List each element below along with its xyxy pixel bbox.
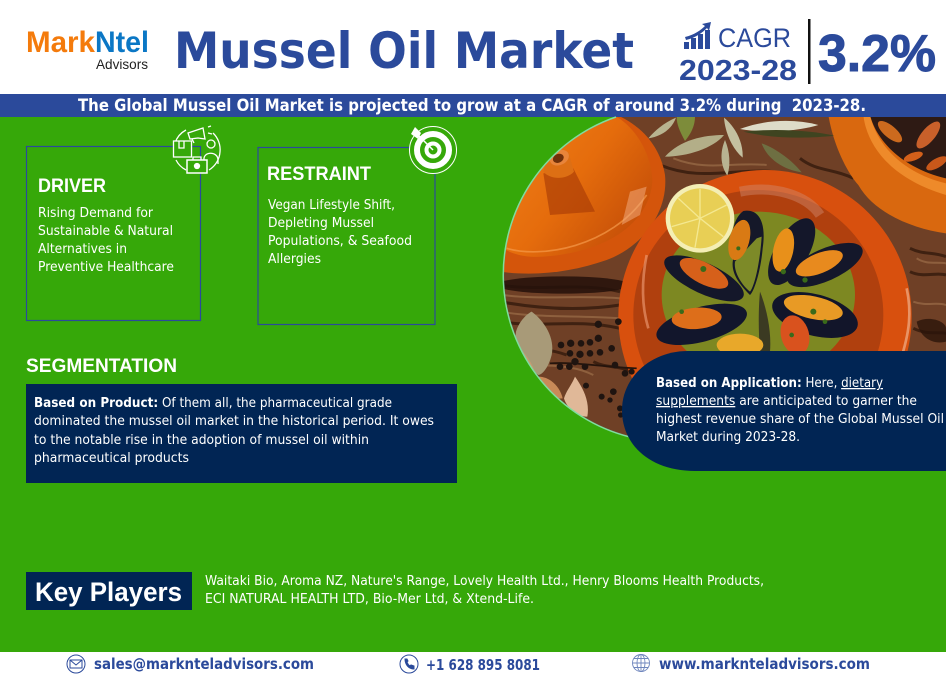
panel: based on product: to the notable rise in the adoption of mussel oil within [34, 433, 369, 448]
panel: restraint [258, 148, 435, 324]
logo: MarkNtel Advisors: Advisors [96, 56, 148, 72]
panel: based on product: dominated the mussel oil market in the historical period. It owes [34, 414, 434, 429]
panel: driver: DRIVER [38, 176, 106, 197]
header background [0, 0, 946, 94]
leaves [648, 117, 834, 176]
bay leaf, garlic and peppercorns [516, 312, 637, 418]
panel: based on application [622, 351, 946, 471]
icon: growth chart [684, 22, 711, 49]
panel: restraint: Depleting Mussel [268, 216, 374, 231]
footer: +1 628 895 8081 [426, 656, 540, 674]
CAGR block [679, 19, 936, 87]
pot top right [828, 115, 946, 233]
icon: driver [174, 126, 220, 173]
plate [618, 170, 912, 378]
key players list: Waitaki Bio, Aroma NZ, Nature's Range, Lovely Health Ltd., Henry Blooms Health Products, [205, 574, 764, 589]
logo: MarkNtel Advisors: Mark [26, 26, 95, 59]
footer: sales@marknteladvisors.com [94, 655, 314, 673]
mussels [652, 211, 869, 358]
photo edge [503, 117, 630, 437]
footer: www.marknteladvisors.com [659, 655, 870, 673]
panel: based on product: pharmaceutical products [34, 451, 189, 466]
photo: mussels on a terracotta plate [497, 115, 946, 463]
panel: restraint: Allergies [268, 252, 321, 267]
panel: based on product: Based on Product: Of them all, the pharmaceutical grade [34, 396, 392, 411]
heading: segmentation: SEGMENTATION [26, 356, 177, 377]
banner: The Global Mussel Oil Market is projected to grow at a CAGR of around 3.2% during 2023-28. [78, 96, 866, 115]
lemon [666, 184, 734, 253]
footer [0, 652, 946, 674]
panel: based on product [26, 384, 457, 483]
logo: MarkNtel Advisors [26, 26, 149, 72]
key players list [205, 574, 764, 607]
logo: MarkNtel Advisors: Ntel [95, 26, 149, 59]
panel: restraint: Vegan Lifestyle Shift, [268, 198, 395, 213]
panel: driver: Preventive Healthcare [38, 260, 174, 275]
panel: driver: Rising Demand for [38, 206, 154, 221]
icon: globe [632, 654, 650, 672]
key players label: Key Players [35, 577, 182, 607]
icon: email [67, 655, 85, 673]
key players list: ECI NATURAL HEALTH LTD, Bio-Mer Ltd, & Xtend-Life. [205, 592, 534, 607]
icon: target [410, 126, 456, 174]
panel: driver: Alternatives in [38, 242, 127, 257]
panel: based on application: Based on Application: Here, dietary [656, 376, 883, 391]
lid [500, 115, 665, 274]
panel: driver [26, 146, 200, 320]
CAGR block: 2023-28 [679, 55, 797, 87]
panel: restraint: RESTRAINT [267, 164, 371, 185]
green background [0, 117, 946, 652]
panel: based on application: supplements are anticipated to garner the [656, 394, 917, 409]
panel: restraint: Populations, & Seafood [268, 234, 412, 249]
panel: driver: Sustainable & Natural [38, 224, 173, 239]
CAGR block: 3.2% [818, 25, 936, 83]
CAGR block: CAGR [718, 23, 791, 53]
icon: phone [400, 655, 418, 673]
panel: based on application: Market during 2023-28. [656, 430, 800, 445]
title: Mussel Oil Market [174, 22, 634, 80]
